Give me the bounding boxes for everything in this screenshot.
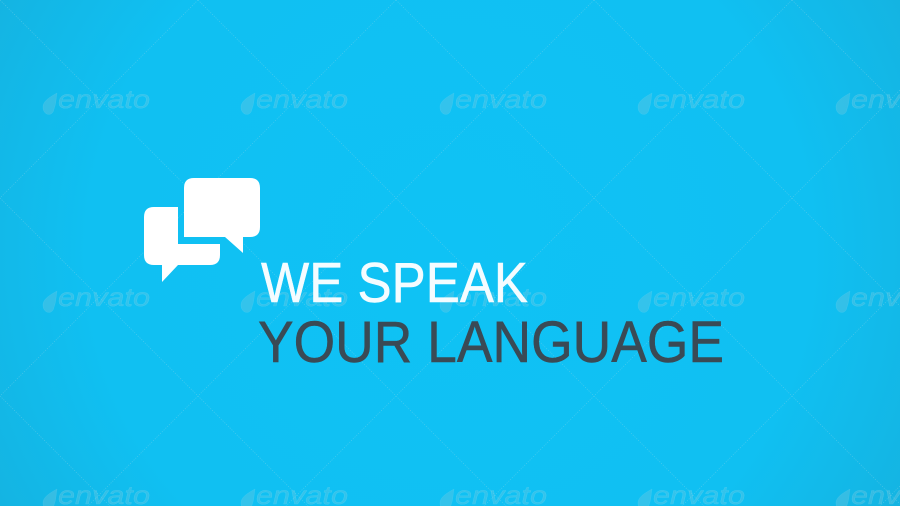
icon: small speech bubble (144, 207, 220, 282)
heading: we speak: WE SPEAK (261, 251, 528, 315)
heading: your language: YOUR LANGUAGE (258, 310, 724, 375)
icon: speech bubbles (144, 178, 260, 282)
icon: large speech bubble (184, 178, 260, 253)
watermarks (43, 84, 900, 506)
